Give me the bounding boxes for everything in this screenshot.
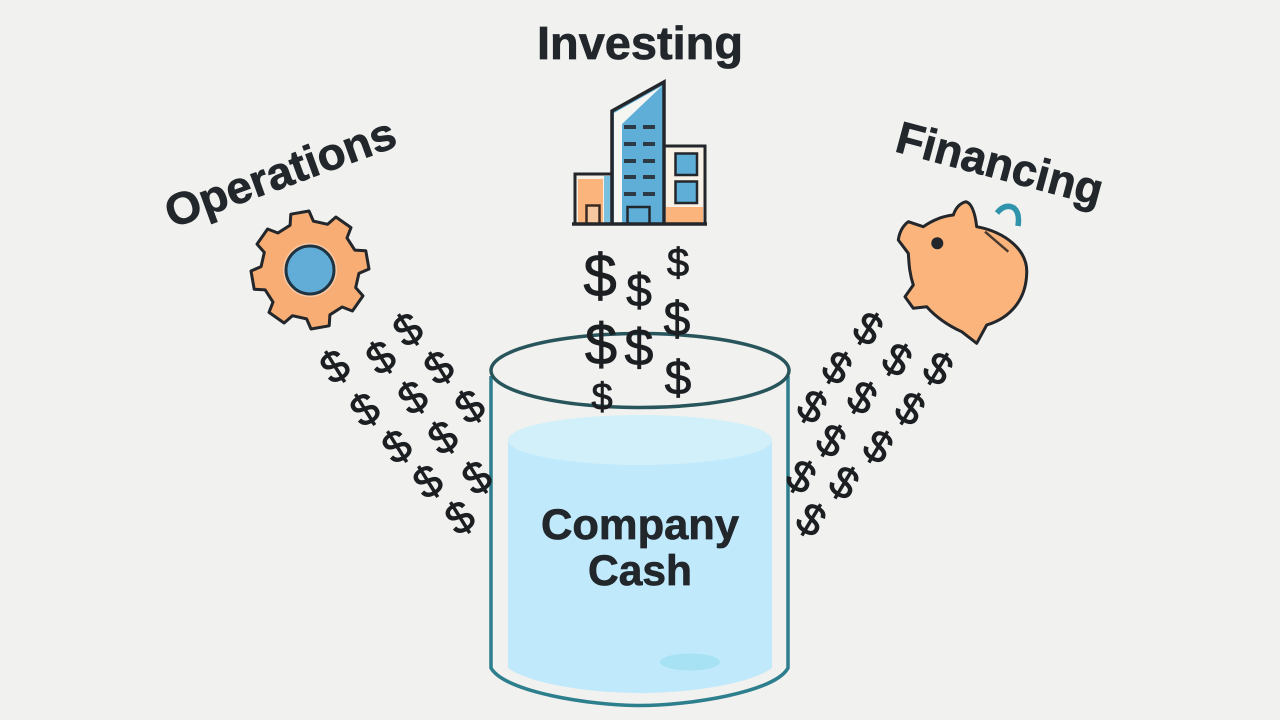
dollar stream: from financing: $ [915, 342, 961, 396]
dollar stream: from investing: $ [665, 352, 691, 405]
dollar stream: from operations: $ [447, 380, 493, 434]
dollar stream: from operations: $ [342, 383, 388, 437]
icon: gear [251, 211, 369, 329]
dollar stream: from operations: $ [390, 371, 436, 425]
dollar stream: from operations: $ [374, 420, 420, 474]
dollar stream: from investing: $ [591, 377, 613, 419]
label: Company Cash: Cash [588, 547, 692, 595]
dollar stream: from financing: $ [845, 302, 891, 356]
cylinder: company cash container [491, 334, 789, 706]
dollar stream: from operations: $ [358, 331, 404, 385]
dollar stream: from investing: $ [664, 293, 690, 346]
dollar stream: from financing: $ [839, 371, 885, 425]
dollar stream: from operations: $ [405, 455, 451, 509]
dollar stream: from financing: $ [789, 380, 835, 434]
dollar stream: from investing [583, 241, 691, 419]
label: Company Cash [541, 501, 739, 595]
dollar stream: from investing: $ [583, 242, 617, 309]
dollar stream: from financing: $ [874, 333, 920, 387]
dollar stream: from financing: $ [855, 420, 901, 474]
dollar stream: from operations: $ [312, 340, 358, 394]
dollar stream: from operations: $ [420, 411, 466, 465]
icon: office building [572, 82, 707, 224]
container walls [491, 376, 788, 706]
heading: Financing: Financing [891, 111, 1109, 216]
icon: piggy bank [898, 202, 1027, 343]
dollar stream: from operations: $ [454, 451, 500, 505]
dollar stream: from investing: $ [585, 312, 617, 377]
dollar stream: from financing: $ [821, 456, 867, 510]
water in the container [508, 415, 772, 693]
dollar stream: from investing: $ [667, 241, 689, 285]
dollar stream: from investing: $ [626, 264, 652, 316]
dollar stream: from financing: $ [808, 414, 854, 468]
dollar stream: from financing: $ [887, 382, 933, 436]
container rim [491, 334, 789, 408]
dollar stream: from financing: $ [778, 450, 824, 504]
dollar stream: from operations: $ [385, 303, 431, 357]
dollar stream: from operations: $ [437, 491, 483, 545]
heading: Investing: Investing [537, 17, 743, 69]
dollar stream: from investing: $ [625, 319, 654, 377]
dollar stream: from financing: $ [814, 341, 860, 395]
dollar stream: from operations: $ [416, 341, 462, 395]
dollar stream: from financing [778, 302, 961, 547]
heading: Operations: Operations [158, 107, 403, 238]
label: Company Cash: Company [541, 501, 739, 549]
dollar stream: from operations [312, 303, 500, 545]
dollar stream: from financing: $ [788, 493, 834, 547]
